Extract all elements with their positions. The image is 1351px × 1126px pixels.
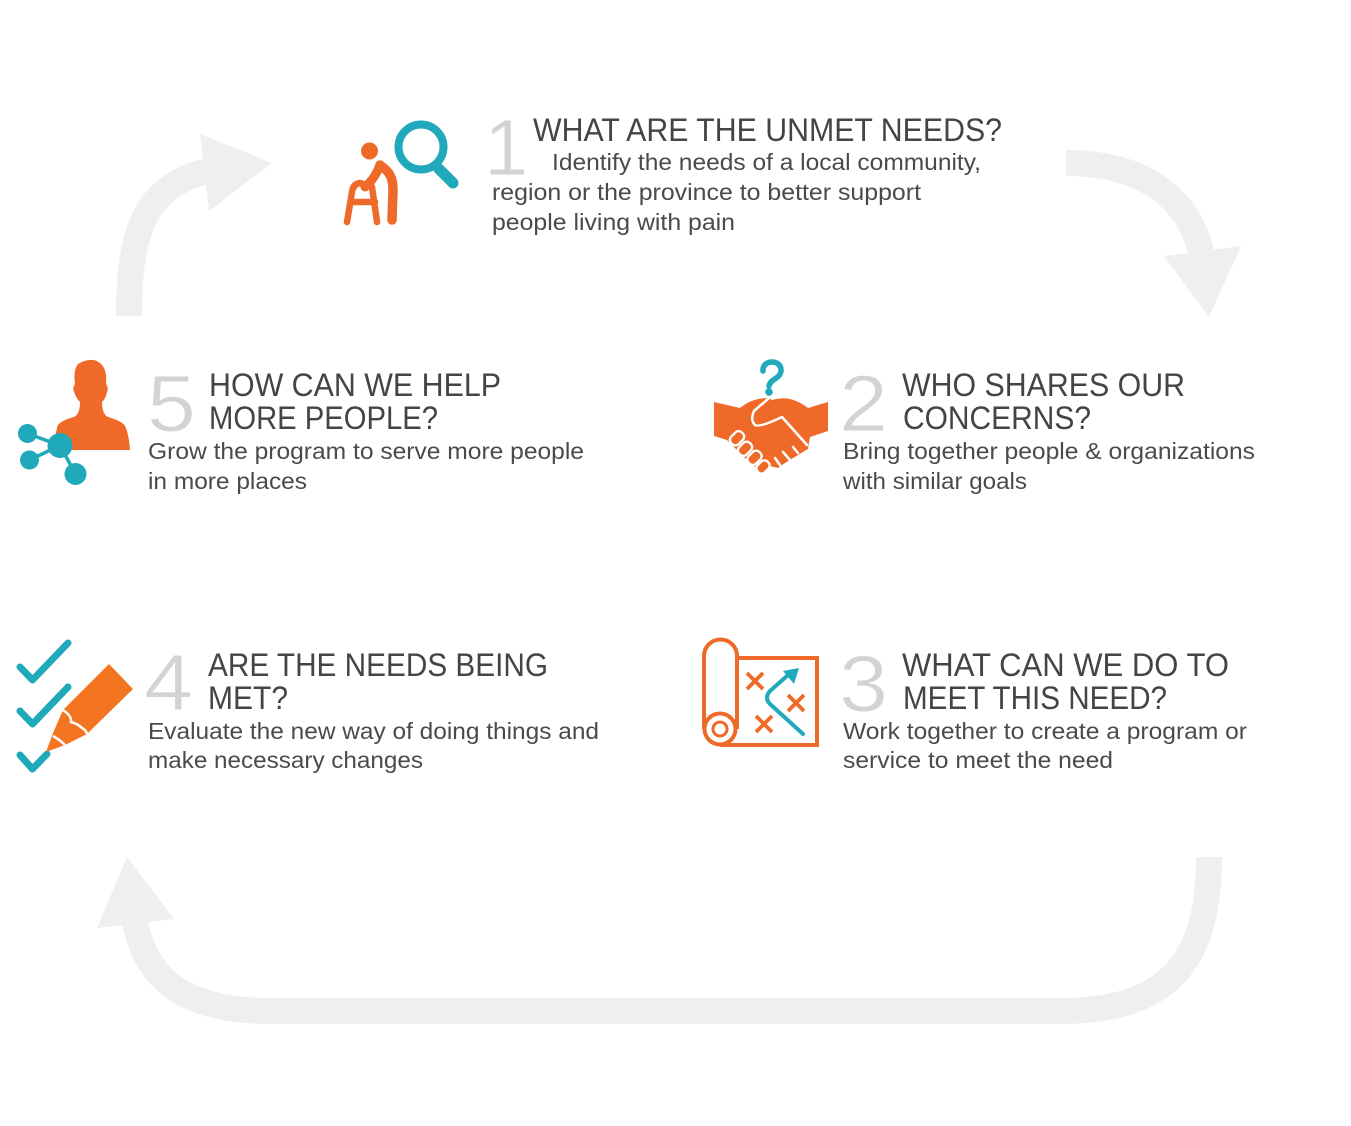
text: step 4 description (148, 718, 599, 773)
text: step 4 description: make necessary changes (148, 747, 423, 773)
icon: person with walker and magnifying glass (347, 124, 453, 222)
arrow: step 1 to step 2 (1066, 163, 1241, 317)
panel: step 4 (20, 638, 599, 773)
panel: step 5 (18, 359, 584, 494)
heading: how can we help: HOW CAN WE HELP (209, 367, 501, 403)
heading: are the needs being met (208, 647, 548, 716)
text: step 3 description (843, 718, 1247, 773)
heading: what can we do (902, 647, 1229, 716)
text: step 3 description: service to meet the need (843, 747, 1113, 773)
heading: how can we help (209, 367, 501, 436)
number 1: 1 (484, 103, 528, 192)
arrow: step 3 back to step 4 (97, 857, 1209, 1011)
text: step 2 description (842, 438, 1255, 494)
panel: step 1 (347, 103, 1002, 235)
text: step 4 description: Evaluate the new way of doing things and (148, 718, 599, 744)
text: step 3 description: Work together to create a program or (843, 718, 1247, 744)
icon: checklist and pencil (20, 643, 133, 769)
panel: step 2 (714, 359, 1255, 494)
number 3: 3 (839, 639, 888, 728)
heading: what can we do: MEET THIS NEED? (903, 680, 1167, 716)
text: step 1 description: Identify the needs of a local community, (552, 149, 981, 175)
heading: are the needs being met: MET? (208, 680, 288, 716)
text: step 5 description: in more places (148, 468, 307, 494)
icon: handshake with question mark (714, 362, 828, 475)
heading: what can we do: WHAT CAN WE DO TO (902, 647, 1229, 683)
icon: person with network (18, 360, 130, 485)
text: step 1 description (492, 149, 981, 235)
text: step 2 description: with similar goals (842, 468, 1027, 494)
panel: step 3 (704, 639, 1247, 773)
heading: who shares: CONCERNS? (903, 400, 1091, 436)
heading: unmet needs: WHAT ARE THE UNMET NEEDS? (533, 112, 1002, 148)
text: step 5 description (148, 438, 584, 494)
heading: are the needs being met: ARE THE NEEDS BEING (208, 647, 548, 683)
text: step 1 description: region or the province to better support (492, 179, 922, 205)
text: step 1 description: people living with pain (492, 209, 735, 235)
arrow: step 5 to step 1 (129, 134, 272, 316)
text: step 2 description: Bring together people & organizations (843, 438, 1255, 464)
icon: plan map (704, 640, 817, 745)
heading: who shares: WHO SHARES OUR (902, 367, 1185, 403)
number 2: 2 (839, 359, 888, 448)
text: step 5 description: Grow the program to serve more people (148, 438, 584, 464)
number 4: 4 (144, 638, 193, 727)
heading: who shares (902, 367, 1185, 436)
number 5: 5 (147, 359, 196, 448)
heading: how can we help: MORE PEOPLE? (209, 400, 438, 436)
